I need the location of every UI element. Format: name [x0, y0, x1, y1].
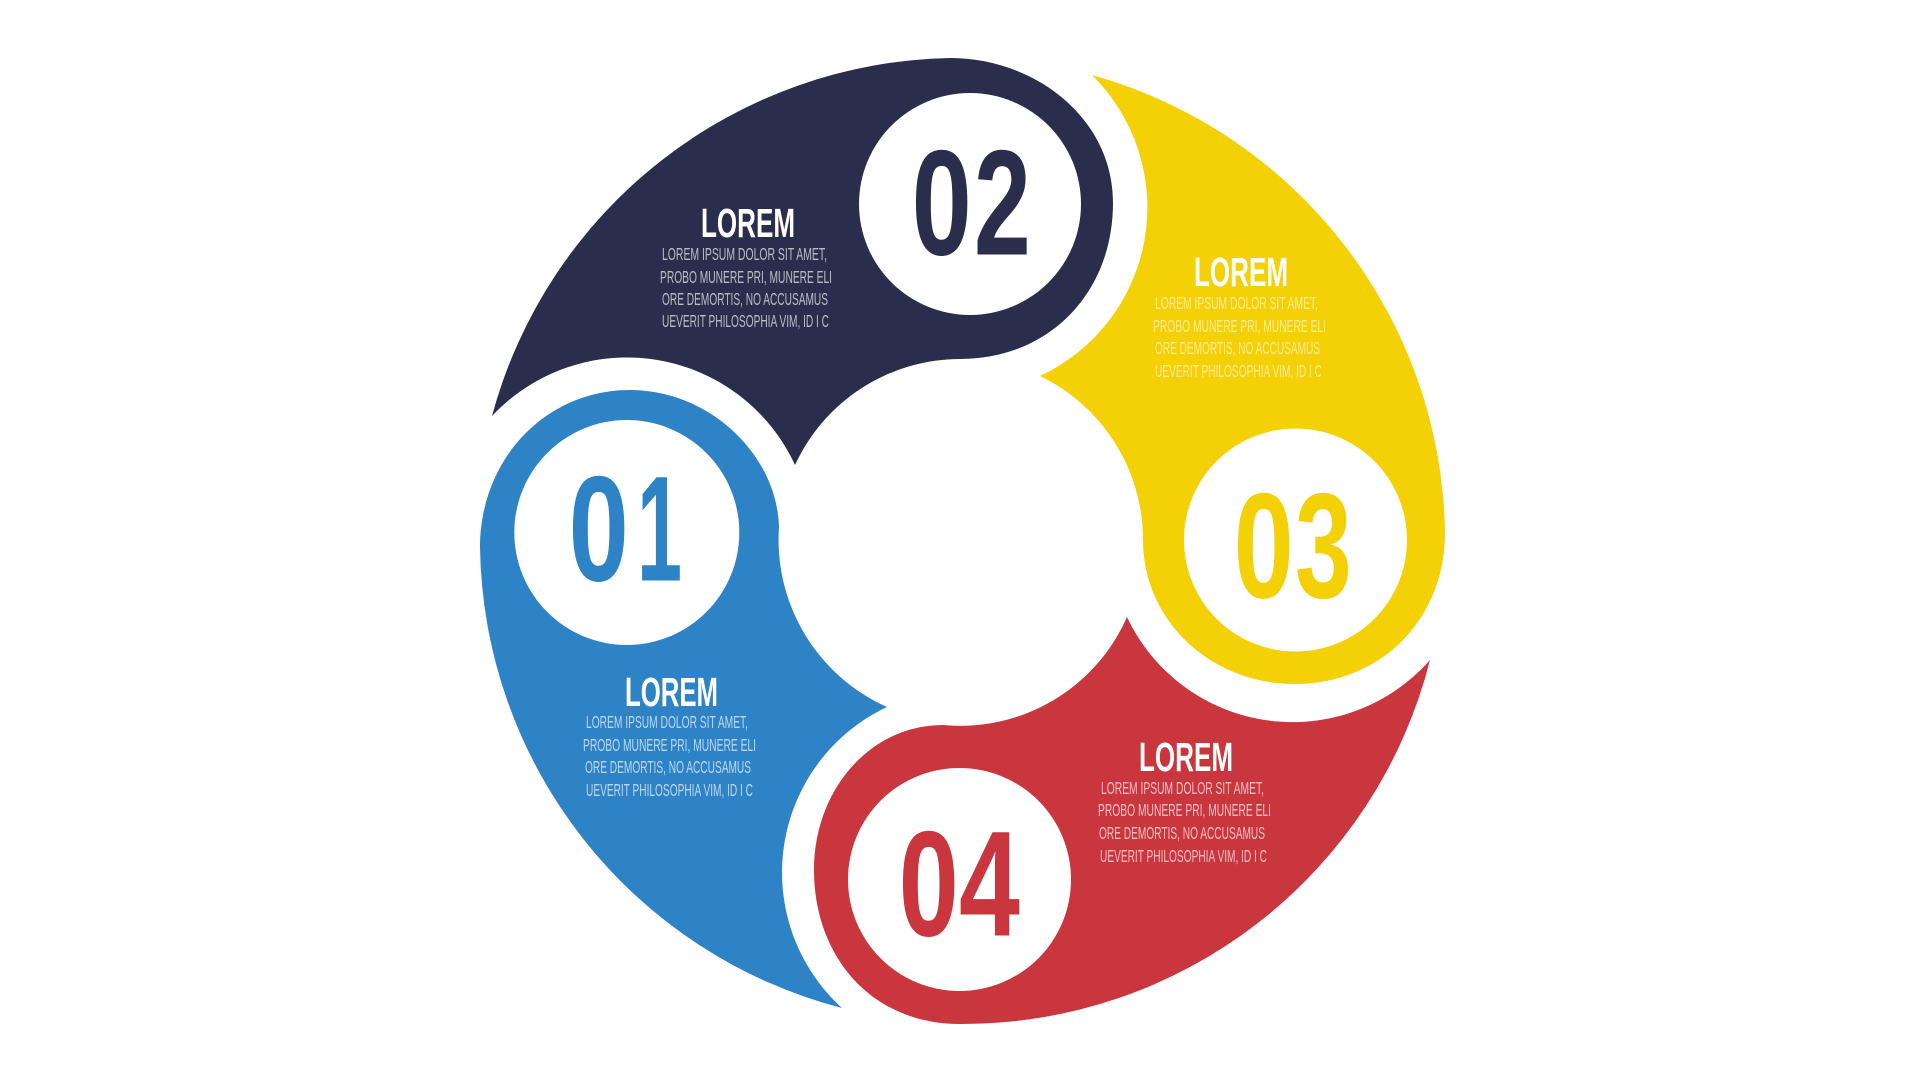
number 04: 4: [959, 800, 1020, 967]
body text: PROBO MUNERE PRI, MUNERE ELI: [583, 735, 756, 755]
body text: ORE DEMORTIS, NO ACCUSAMUS: [1155, 338, 1320, 358]
body text: LOREM IPSUM DOLOR SIT AMET,: [662, 244, 827, 264]
body text: UEVERIT PHILOSOPHIA VIM, ID I C: [1100, 846, 1267, 866]
number 04: [899, 800, 1020, 968]
body text: ORE DEMORTIS, NO ACCUSAMUS: [662, 289, 828, 309]
red segment: [814, 617, 1430, 1024]
body text: PROBO MUNERE PRI, MUNERE ELI: [660, 267, 832, 287]
body text: PROBO MUNERE PRI, MUNERE ELI: [1098, 800, 1271, 820]
number 04: 0: [899, 800, 959, 968]
body text: ORE DEMORTIS, NO ACCUSAMUS: [585, 757, 751, 777]
number 02: [912, 119, 1031, 287]
badge circle 03: [1184, 428, 1407, 652]
badge circle 04: [848, 768, 1071, 991]
blue segment: [480, 390, 887, 1008]
body text: LOREM IPSUM DOLOR SIT AMET,: [586, 712, 748, 732]
number 03: [1234, 462, 1352, 630]
number 02: 2: [974, 120, 1031, 287]
panel: 04 red: [814, 617, 1430, 1024]
body text: LOREM IPSUM DOLOR SIT AMET,: [1155, 293, 1318, 313]
body text: [583, 712, 756, 800]
number 01: 1: [637, 445, 682, 613]
badge circle 02: [859, 93, 1081, 315]
heading: LOREM: [1194, 249, 1288, 295]
panel: 02 navy: [492, 58, 1113, 465]
body text: UEVERIT PHILOSOPHIA VIM, ID I C: [586, 780, 753, 800]
body text: [660, 244, 832, 331]
heading: LOREM: [625, 669, 718, 715]
number 02: 0: [912, 119, 972, 287]
heading: LOREM: [701, 200, 795, 246]
navy segment: [492, 58, 1113, 465]
yellow segment: [1040, 75, 1445, 684]
body text: PROBO MUNERE PRI, MUNERE ELI: [1153, 316, 1326, 336]
panel: 01 blue: [480, 390, 887, 1008]
number 03: 3: [1295, 463, 1352, 630]
badge circle 01: [514, 420, 739, 645]
body text: LOREM IPSUM DOLOR SIT AMET,: [1101, 778, 1264, 798]
body text: [1153, 293, 1326, 381]
body text: UEVERIT PHILOSOPHIA VIM, ID I C: [662, 311, 829, 331]
panel: 03 yellow: [1040, 75, 1445, 684]
body text: ORE DEMORTIS, NO ACCUSAMUS: [1099, 823, 1265, 843]
number 03: 0: [1234, 462, 1294, 630]
heading: LOREM: [1139, 734, 1233, 780]
body text: UEVERIT PHILOSOPHIA VIM, ID I C: [1155, 361, 1322, 381]
body text: [1098, 778, 1271, 866]
number 01: [569, 445, 682, 613]
number 01: 0: [569, 445, 629, 613]
